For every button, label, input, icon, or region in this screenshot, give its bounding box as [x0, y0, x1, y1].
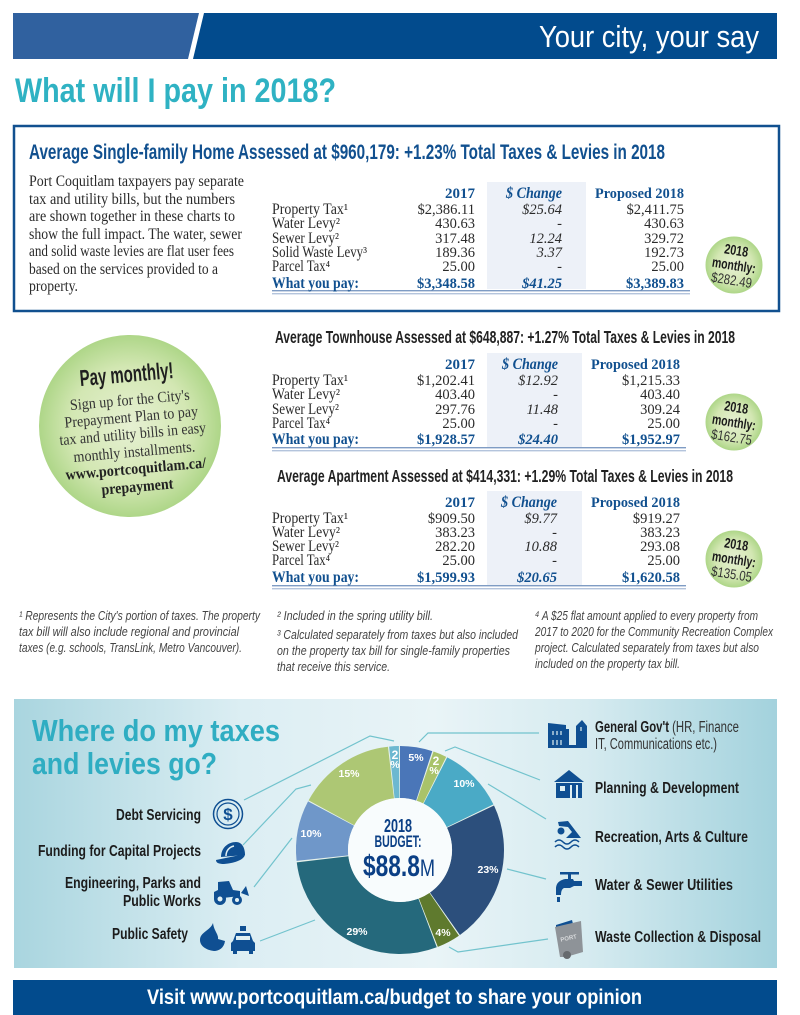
label: engineering: [65, 875, 201, 910]
table: townhouse: 309.24: [640, 402, 681, 418]
intro paragraph: are shown together in these charts to: [29, 208, 235, 225]
donut percent labels: 2: [392, 748, 399, 762]
footnote 1: taxes (e.g. schools, TransLink, Metro Vancouver).: [19, 641, 242, 655]
label: general government: General Gov't (HR, Finance: [595, 719, 739, 736]
callout: pay monthly: [39, 335, 221, 517]
footnotes 2 and 3: ³ Calculated separately from taxes but also included: [277, 628, 519, 642]
table: single-family home: What you pay:: [272, 275, 359, 292]
table: apartment: Water Levy²: [272, 524, 340, 541]
callout body: www.portcoquitlam.ca/: [65, 454, 207, 484]
header tagline: Your city, your say: [539, 19, 759, 54]
badge: monthly 282.49: [706, 236, 762, 294]
icon: hard hat: [216, 842, 245, 864]
badge: monthly 162.75: $162.75: [710, 426, 753, 448]
table: townhouse: $1,215.33: [622, 373, 680, 389]
section heading: and levies go?: [32, 746, 217, 781]
table: apartment: 383.23: [640, 525, 680, 541]
icon: swimmer: [555, 821, 581, 849]
table: townhouse: $24.40: [517, 432, 558, 448]
badge: monthly 282.49: monthly:: [711, 254, 757, 276]
icon: coin: [214, 800, 242, 828]
footnotes 2 and 3: ² Included in the spring utility bill.: [277, 609, 433, 623]
table: apartment: -: [552, 525, 557, 541]
panel: where taxes go: [14, 699, 777, 968]
table: apartment: $9.77: [524, 511, 558, 527]
table: apartment: What you pay:: [272, 569, 359, 586]
table: townhouse: Water Levy²: [272, 386, 340, 403]
badge: monthly 282.49: $282.49: [710, 269, 753, 291]
callout body: monthly installments.: [73, 438, 196, 466]
donut centre total: $88.8M: [363, 850, 435, 883]
icon: police car: [231, 926, 255, 954]
table: apartment: $1,599.93: [417, 570, 475, 586]
callout body: tax and utility bills in easy: [59, 419, 207, 449]
table: townhouse: 2017: [445, 357, 476, 373]
intro paragraph: [29, 173, 244, 295]
icon: tap: [556, 872, 582, 902]
table: single-family home: 2017: [445, 186, 476, 202]
label: waste: Waste Collection & Disposal: [595, 929, 761, 946]
table: apartment: $ Change: [500, 494, 557, 511]
table: townhouse: 403.40: [640, 387, 680, 403]
table: single-family home: 329.72: [644, 231, 684, 247]
table: apartment: 25.00: [647, 553, 680, 569]
footnote 4: [534, 609, 774, 671]
header banner: [13, 13, 777, 59]
table: single-family home: Water Levy²: [272, 215, 340, 232]
icon: house: [554, 770, 584, 798]
intro paragraph: property.: [29, 278, 78, 295]
table: apartment: Sewer Levy²: [272, 538, 339, 555]
donut percent labels: 4%: [435, 927, 451, 939]
table: townhouse: 25.00: [647, 416, 680, 432]
section heading: [32, 713, 280, 781]
footnotes 2 and 3: on the property tax bill for single-family properties: [277, 644, 510, 658]
icon: waste bin: [555, 920, 583, 959]
intro paragraph: Port Coquitlam taxpayers pay separate: [29, 173, 244, 190]
intro paragraph: show the full impact. The water, sewer: [29, 226, 243, 243]
donut percent labels: [300, 748, 499, 939]
badge: monthly 135.05: [706, 530, 762, 588]
badge: monthly 135.05: 2018: [723, 534, 750, 554]
table: single-family home: -: [557, 216, 562, 232]
table: townhouse: Property Tax¹: [272, 372, 348, 389]
table: single-family home: 430.63: [435, 216, 475, 232]
donut centre total: 2018: [384, 816, 412, 836]
table: apartment: Parcel Tax⁴: [272, 552, 330, 569]
table: apartment: 2017: [445, 495, 476, 511]
table: townhouse: Proposed 2018: [591, 357, 680, 373]
table: single-family home: 12.24: [529, 231, 562, 247]
table: townhouse: 297.76: [435, 402, 475, 418]
table: apartment: 10.88: [524, 539, 558, 555]
callout body: prepayment: [101, 475, 175, 499]
donut percent labels: 10%: [453, 778, 475, 790]
table: single-family home: $25.64: [522, 202, 562, 218]
table: apartment: $1,620.58: [622, 570, 680, 586]
table: single-family home: $3,348.58: [417, 276, 475, 292]
table: townhouse: $1,928.57: [417, 432, 475, 448]
table: single-family home: $ Change: [505, 185, 562, 202]
badge: monthly 162.75: 2018: [723, 397, 750, 417]
label: engineering: Engineering, Parks and: [65, 875, 201, 892]
donut percent labels: 29%: [346, 926, 368, 938]
table: single-family home: Proposed 2018: [595, 186, 684, 202]
callout body: [56, 386, 212, 502]
table: single-family home: 430.63: [644, 216, 684, 232]
footer banner: [13, 980, 777, 1015]
donut percent labels: 23%: [477, 864, 499, 876]
table: single-family home: -: [557, 259, 562, 275]
callout heading: Pay monthly!: [79, 357, 174, 391]
callout body: Sign up for the City's: [69, 387, 190, 414]
table: single-family home: Solid Waste Levy³: [272, 244, 367, 261]
label: water: Water & Sewer Utilities: [595, 877, 733, 894]
donut percent labels: 5%: [408, 752, 424, 764]
table: townhouse: $12.92: [518, 373, 558, 389]
icon: city hall: [548, 720, 587, 748]
table: townhouse: Sewer Levy²: [272, 401, 339, 418]
icon: flame: [200, 923, 225, 951]
footnote 4: included on the property tax bill.: [535, 657, 680, 671]
table: apartment: 282.20: [435, 539, 475, 555]
table: single-family home: 25.00: [651, 259, 684, 275]
table: townhouse: -: [553, 387, 558, 403]
donut centre total: BUDGET:: [374, 832, 422, 851]
panel: single-family home: [14, 126, 779, 311]
label: general government: IT, Communications etc.): [595, 736, 717, 753]
table: apartment: $909.50: [428, 511, 475, 527]
footnote 1: tax bill will also include regional and provincial: [19, 625, 240, 639]
donut percent labels: %: [390, 759, 400, 771]
table: apartment: [272, 491, 686, 589]
table: single-family home: 3.37: [536, 245, 563, 261]
intro paragraph: based on the services provided to a: [29, 261, 218, 278]
table: single-family home: $2,386.11: [418, 202, 475, 218]
label: public safety: Public Safety: [112, 926, 188, 943]
icon: coin: $: [223, 805, 233, 824]
donut percent labels: %: [429, 765, 439, 777]
table: single-family home: 189.36: [435, 245, 475, 261]
table: townhouse: -: [553, 416, 558, 432]
table: townhouse: $1,952.97: [622, 432, 680, 448]
badge: monthly 162.75: [706, 394, 762, 450]
table: single-family home: 317.48: [435, 231, 475, 247]
table: single-family home: Property Tax¹: [272, 201, 348, 218]
intro paragraph: tax and utility bills, but the numbers: [29, 191, 235, 208]
donut percent labels: 10%: [300, 828, 322, 840]
label: general government: [595, 719, 739, 753]
callout body: Prepayment Plan to pay: [64, 403, 199, 432]
table: single-family home: [272, 182, 690, 294]
donut chart: [292, 742, 508, 958]
label: recreation: Recreation, Arts & Culture: [595, 829, 748, 846]
icon: waste bin: PORT: [560, 934, 578, 944]
table: townhouse: 403.40: [435, 387, 475, 403]
section heading: Where do my taxes: [32, 713, 280, 748]
table: single-family home: Sewer Levy²: [272, 230, 339, 247]
footnotes 2 and 3: that receive this service.: [277, 660, 390, 674]
label: planning: Planning & Development: [595, 780, 739, 797]
table: apartment: 293.08: [640, 539, 680, 555]
table: townhouse: $1,202.41: [417, 373, 475, 389]
intro paragraph: and solid waste levies are flat user fees: [29, 243, 234, 260]
table: apartment: 383.23: [435, 525, 475, 541]
label: capital projects: Funding for Capital Projects: [38, 843, 201, 860]
footer text: Visit www.portcoquitlam.ca/budget to share your opinion: [147, 985, 642, 1009]
badge: monthly 162.75: monthly:: [711, 411, 757, 433]
table: apartment: Proposed 2018: [591, 495, 680, 511]
table: apartment: 25.00: [442, 553, 475, 569]
table: single-family home: Parcel Tax⁴: [272, 258, 330, 275]
table: townhouse: Parcel Tax⁴: [272, 415, 330, 432]
icon: loader: [214, 881, 249, 905]
table: apartment: -: [552, 553, 557, 569]
leader lines: [243, 733, 548, 952]
donut centre total: [363, 816, 435, 883]
footnote 1: [19, 609, 261, 655]
table: apartment: $20.65: [516, 570, 557, 586]
table: townhouse: $ Change: [501, 356, 558, 373]
table: townhouse: What you pay:: [272, 431, 359, 448]
table: single-family home: $41.25: [521, 276, 562, 292]
donut percent labels: 2: [433, 754, 440, 768]
table: townhouse: 11.48: [526, 402, 559, 418]
main title: What will I pay in 2018?: [15, 72, 336, 110]
table: apartment: $919.27: [633, 511, 680, 527]
table: single-family home: 25.00: [442, 259, 475, 275]
table: townhouse: 25.00: [442, 416, 475, 432]
label: debt servicing: Debt Servicing: [116, 807, 201, 824]
label: engineering: Public Works: [123, 893, 201, 910]
donut percent labels: 15%: [338, 768, 360, 780]
badge: monthly 135.05: monthly:: [711, 548, 757, 570]
badge: monthly 282.49: 2018: [723, 240, 750, 260]
badge: monthly 135.05: $135.05: [710, 563, 753, 585]
table: apartment: Property Tax¹: [272, 510, 348, 527]
footnote 1: ¹ Represents the City's portion of taxes. The property: [19, 609, 261, 623]
footnotes 2 and 3: [277, 609, 519, 674]
table: townhouse: [272, 353, 686, 451]
table: single-family home: $2,411.75: [627, 202, 684, 218]
table: single-family home: 192.73: [644, 245, 684, 261]
table: single-family home: $3,389.83: [626, 276, 684, 292]
